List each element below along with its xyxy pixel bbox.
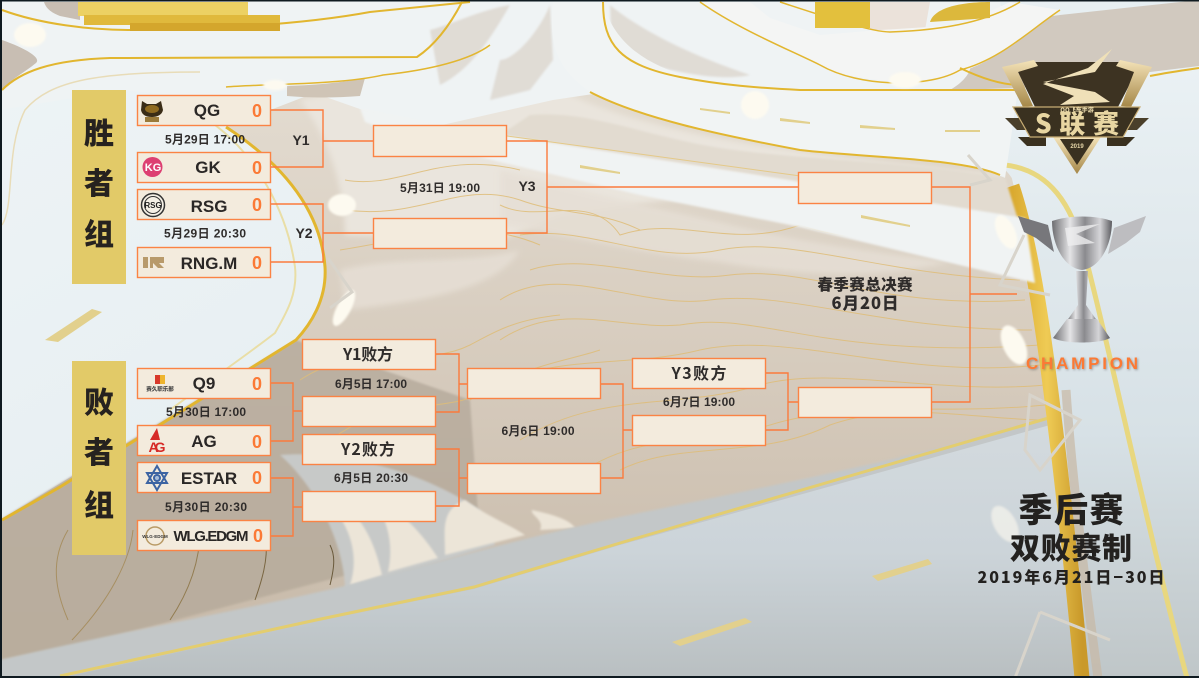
team: RNG.M [138,248,270,278]
background: right side gold strips [1012,186,1082,678]
icon: S league emblem [1002,49,1152,174]
date: June 6: 6月6日 19:00 [502,424,575,438]
bracket connector lines [271,110,1017,536]
text: champion: CHAMPION [1026,354,1138,373]
icon: silver trophy [1018,216,1146,342]
label: spring finals date [818,273,913,314]
label: Y3: Y3 [518,178,536,194]
team: WLG.EDGM: 0 [253,526,263,546]
date: RSG vs RNG.M: 5月29日 20:30 [164,226,246,240]
label: spring finals date: 春季赛总决赛 [818,273,913,295]
team: QG [138,96,270,126]
date: QG vs GK: 5月29日 17:00 [165,132,245,146]
background: road A [552,2,1018,178]
icon: S league emblem: QQ飞车手游 [1060,105,1094,114]
background: gold diagonal rail [60,417,1052,676]
team: ESTAR [138,462,270,492]
team: GK: GK [195,158,221,177]
icon: RNG logo [143,257,164,268]
icon: GK logo: KG [145,162,161,174]
date: winners round two: 5月31日 19:00 [400,181,480,195]
background: bracket frames [328,155,1110,678]
match: Y2 loser slot [302,434,436,464]
date: ESTAR vs WLG.EDGM: 5月30日 20:30 [165,500,247,514]
panel: winners group label: 者 [84,159,114,203]
background: wave lines [56,164,1045,640]
date: June 7: 6月7日 19:00 [663,395,735,409]
background: edge bars [0,0,1199,2]
match: Y1 loser slot [302,340,436,370]
team: GK: 0 [252,158,262,178]
background: grey arc near lower lanes [280,454,495,590]
background: feather band between roads [500,114,1020,226]
team: GK [138,152,270,182]
icon: QG logo [141,101,163,122]
panel: losers group label: 者 [84,428,114,472]
match: losers round three top [468,368,600,398]
background: light lanes lower centre [320,495,575,585]
match: ESTAR WLG winner slot [302,492,436,522]
subtitle: double elimination: 双败赛制 [1010,524,1132,568]
match: losers final slot [798,388,932,418]
team: ESTAR: 0 [252,468,262,488]
team: Q9 [138,368,270,398]
background: lower grey deck [60,425,1085,678]
icon: AG logo: AG [148,439,166,455]
date: June 5 20:30: 6月5日 20:30 [334,471,408,485]
panel: winners group label: 胜 [84,109,114,153]
background: white U road at top [700,2,1060,81]
background: white blobs [14,23,1033,547]
panel: losers group label: 组 [84,481,114,525]
background: top white area [0,2,1020,130]
match: losers semifinal slot [632,416,766,446]
match: Y3 loser slot [632,358,766,388]
team: RSG [138,190,270,220]
team: WLG.EDGM [138,520,270,550]
background: top left taupe pieces [44,2,80,20]
panel: winners group label: 组 [84,210,114,254]
background: pale inner rail [2,72,830,410]
label: Y1: Y1 [292,132,310,148]
label: spring finals date: 6月20日 [832,290,898,314]
team: Q9: Q9 [193,374,215,393]
icon: S league emblem: S联赛 [1035,104,1119,141]
match: Q9 AG winner slot [302,396,436,426]
match: Y1 loser slot: Y1败方 [342,341,393,365]
text: playoffs date range: 2019年6月21日−30日 [978,564,1164,588]
match: Y3 loser slot: Y3败方 [670,360,726,384]
panel: winners group label [72,90,126,284]
team: AG: AG [191,432,217,451]
match: winners semifinal bottom [374,218,506,248]
background: gold road edges [2,2,1199,520]
date: June 5 17:00: 6月5日 17:00 [335,377,407,391]
date: Q9 vs AG: 5月30日 17:00 [166,405,246,419]
panel: losers group label [72,361,126,555]
background: gold pagoda at top [78,2,990,31]
icon: ESTAR logo [147,466,167,490]
team: Q9: 0 [252,374,262,394]
background: dark lower-left taupe [0,340,480,660]
match: Y2 loser slot: Y2败方 [340,436,395,460]
background: upper feather zone [300,79,1010,240]
background: right marble [1005,66,1199,678]
match: winners final slot [798,172,932,204]
team: QG: 0 [252,101,262,121]
background: light ridges below road [340,170,950,310]
team: RSG: 0 [252,195,262,215]
background: top feather shading [430,5,750,100]
team: RSG: RSG [191,197,227,216]
match: losers round three bottom [468,464,600,494]
icon: Q9 logo: 赛久职乐部 [146,385,174,393]
icon: RSG logo: RSG [144,201,162,210]
title: playoffs: 季后赛 [1018,483,1124,532]
icon: WLG logo: WLG·EDGM [142,534,168,539]
panel: losers group label: 败 [84,378,114,422]
background: top right taupe [950,0,1199,90]
background: grey road band above rail [0,417,1060,678]
label: Y2: Y2 [295,225,313,241]
background: road B [360,108,1035,283]
team: QG: QG [194,101,220,120]
match: winners semifinal top [374,126,506,156]
team: WLG.EDGM: WLG.EDGM [174,528,248,545]
icon: S league emblem: 2019 [1070,144,1084,150]
team: RNG.M: RNG.M [181,254,237,273]
team: ESTAR: ESTAR [181,469,237,488]
team: AG: 0 [252,432,262,452]
team: AG [138,426,270,456]
team: RNG.M: 0 [252,253,262,273]
background: road dashes [45,108,980,646]
